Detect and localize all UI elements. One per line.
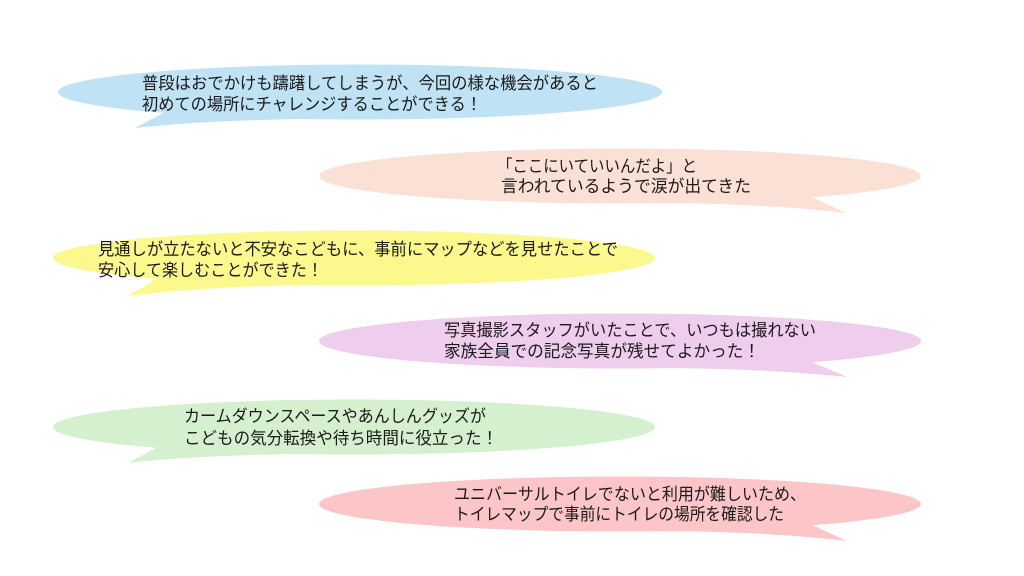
speech bubble: green: [53, 400, 655, 463]
speech bubble: yellow: [53, 230, 655, 296]
speech bubble: purple: 写真撮影スタッフがいたことで、いつもは撮れない: [444, 321, 816, 340]
speech bubble: peach: 「ここにいていいんだよ」と: [497, 157, 697, 176]
speech bubble: peach: [319, 148, 921, 213]
speech bubble: green: こどもの気分転換や待ち時間に役立った！: [184, 429, 498, 448]
speech bubble: yellow: 安心して楽しむことができた！: [98, 261, 323, 280]
speech bubble: blue: 初めての場所にチャレンジすることができる！: [142, 95, 482, 114]
speech bubble: pink: [319, 476, 921, 541]
speech bubble: purple: 家族全員での記念写真が残せてよかった！: [444, 342, 760, 361]
speech bubble: blue: [58, 64, 662, 128]
speech bubble: purple: [319, 314, 921, 377]
speech bubble: blue: 普段はおでかけも躊躇してしまうが、今回の様な機会があると: [142, 73, 598, 93]
speech bubble: pink: トイレマップで事前にトイレの場所を確認した: [454, 505, 784, 524]
speech bubble: pink: ユニバーサルトイレでないと利用が難しいため、: [454, 485, 806, 504]
speech bubble: peach: 言われているようで涙が出てきた: [501, 177, 751, 196]
speech bubble: green: カームダウンスペースやあんしんグッズが: [184, 407, 486, 426]
speech bubble: yellow: 見通しが立たないと不安なこどもに、事前にマップなどを見せたことで: [98, 240, 618, 259]
